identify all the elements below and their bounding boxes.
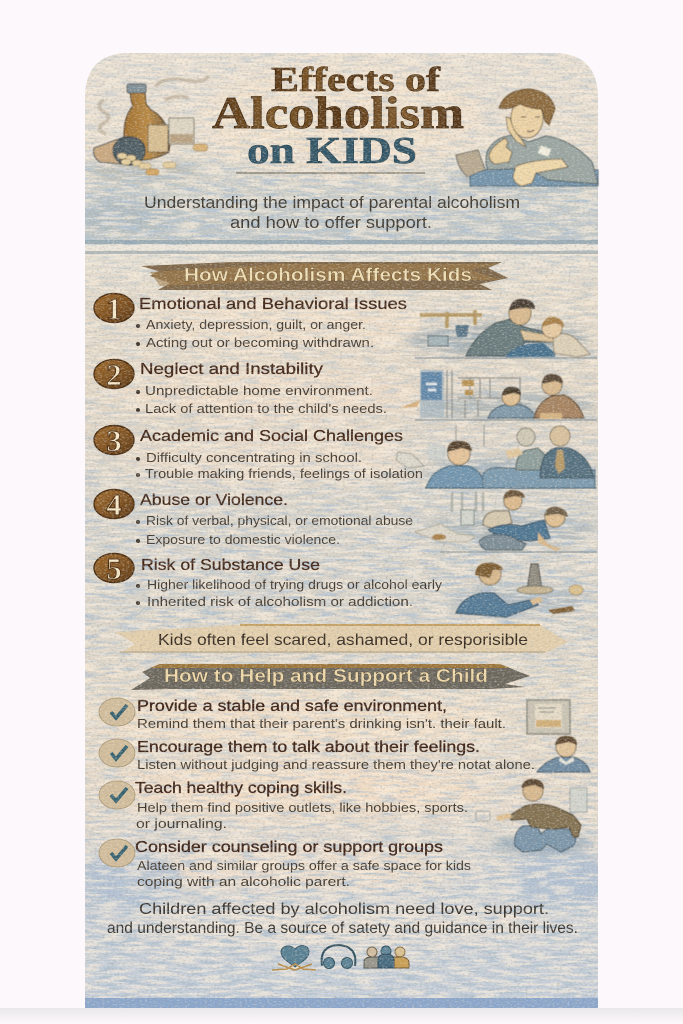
bullets: [136, 317, 374, 350]
section banner: How to Help and Support a Child: How to Help and Support a Child: [164, 666, 488, 686]
callout ribbon: [115, 625, 568, 653]
illustration: framed note: [527, 700, 570, 734]
tip text: Alateen and similar groups offer a safe space for kids: [137, 858, 472, 873]
illustration: home, child and adult: [400, 370, 584, 419]
heading: Emotional and Behavioral Issues: [139, 296, 407, 313]
heading: Neglect and Instability: [140, 361, 323, 378]
bullets: Lack of attention to the child's needs.: [145, 401, 387, 416]
closing message: Children affected by alcoholism need love, support.: [139, 901, 549, 918]
bullets: Anxiety, depression, guilt, or anger.: [146, 317, 366, 332]
effect 3: Academic and Social Challenges: [94, 423, 595, 488]
tip text: Help them find positive outlets, like hobbies, sports.: [137, 800, 468, 815]
tip text: [136, 800, 468, 831]
illustration: smiling boy: [537, 736, 590, 772]
cool washes behind the row illustrations: [60, 162, 610, 910]
header divider band: [85, 240, 598, 244]
row separators: [415, 358, 597, 552]
number badge 5: 5: [106, 551, 122, 586]
panel: textured background: [60, 53, 610, 1008]
heading: Risk of Substance Use: [141, 557, 320, 574]
icon: group of people: [364, 946, 409, 968]
tip 4: [99, 839, 472, 889]
bullets: [136, 450, 423, 481]
title line: Alcoholism: Alcoholism: [212, 87, 464, 138]
effect 1: Emotional and Behavioral Issues: [94, 291, 590, 357]
tip text: Listen without judging and reassure them they're notat alone.: [137, 757, 535, 772]
effect 5: Risk of Substance Use: [94, 551, 583, 617]
effect 2: Neglect and Instability: [94, 357, 584, 419]
illustration: sad boy with head on hand: [456, 89, 598, 186]
tip 3: [99, 780, 468, 831]
tip text: [137, 858, 472, 889]
subtitle: and how to offer support.: [230, 214, 432, 232]
number badge 5: [94, 551, 134, 586]
section banner: How Alcoholism Affects Kids: How Alcoholism Affects Kids: [184, 264, 472, 285]
number badge 3: 3: [106, 423, 122, 458]
check badge: [99, 781, 135, 809]
title line: Effects of: Effects of: [271, 60, 440, 99]
section banner: How Alcoholism Affects Kids: [141, 262, 508, 290]
bullets: [136, 383, 387, 416]
title: [212, 60, 464, 172]
tip heading: Encourage them to talk about their feelings.: [137, 739, 480, 756]
tip heading: Provide a stable and safe environment,: [137, 698, 447, 715]
illustration: isolated child and talking adults: [396, 425, 595, 488]
subtitle: [144, 194, 520, 232]
tip 1: [99, 698, 506, 731]
subtitle: Understanding the impact of parental alcoholism: [144, 194, 520, 212]
heading: Abuse or Violence.: [140, 492, 288, 509]
number badge 1: 1: [106, 291, 122, 326]
bottom blue band: [85, 998, 598, 1008]
section banner: How to Help and Support a Child: [131, 664, 530, 690]
number badge 1: [94, 291, 134, 326]
tip text: coping with an alcoholic parert.: [137, 874, 350, 889]
check badge: [99, 698, 135, 726]
icon: headphones: [322, 945, 355, 968]
illustration: boy reaching for a bottle: [456, 563, 583, 617]
bullets: Unpredictable home environment.: [145, 383, 373, 398]
tip 2: [99, 739, 535, 772]
bullets: Inherited risk of alcoholism or addiction.: [147, 594, 413, 609]
title line: on KIDS: on KIDS: [247, 130, 417, 172]
check badge: [99, 739, 135, 767]
tip text: or journaling.: [136, 816, 227, 831]
bullets: Risk of verbal, physical, or emotional abuse: [146, 513, 413, 528]
number badge 4: [94, 487, 134, 522]
check badge: [99, 839, 135, 867]
tip text: Remind them that their parent's drinking isn't. their fault.: [137, 716, 506, 731]
bullets: Trouble making friends, feelings of isolation: [145, 466, 423, 481]
footer icons: [272, 945, 409, 970]
illustration: bottle, glass and pills: [94, 76, 209, 175]
icon: heart on open book: [272, 946, 316, 970]
bullets: Difficulty concentrating in school.: [146, 450, 362, 465]
number badge 2: [94, 357, 134, 392]
heading: Academic and Social Challenges: [140, 428, 403, 445]
illustration: crouching boy: [476, 779, 590, 854]
number badge 2: 2: [106, 357, 122, 392]
bullets: [136, 577, 443, 609]
callout ribbon: Kids often feel scared, ashamed, or resporisible: [158, 632, 528, 649]
effect 4: Abuse or Violence: [94, 487, 568, 551]
bullets: [136, 513, 413, 547]
number badge 3: [94, 423, 134, 458]
illustration: children on the floor: [415, 490, 568, 551]
bullets: Exposure to domestic violence.: [146, 532, 340, 547]
number badge 4: 4: [106, 487, 122, 522]
tip heading: Teach healthy coping skills.: [135, 780, 347, 797]
bullets: Acting out or becoming withdrawn.: [146, 335, 374, 350]
bullets: Higher likelihood of trying drugs or alcohol early: [147, 577, 443, 592]
tip heading: Consider counseling or support groups: [135, 839, 443, 856]
closing message: and understanding. Be a source of satety and guidance in their lives.: [107, 920, 578, 937]
closing message: [107, 901, 578, 937]
illustration: man comforting child: [420, 299, 590, 357]
warm patches behind the text: [90, 65, 550, 947]
